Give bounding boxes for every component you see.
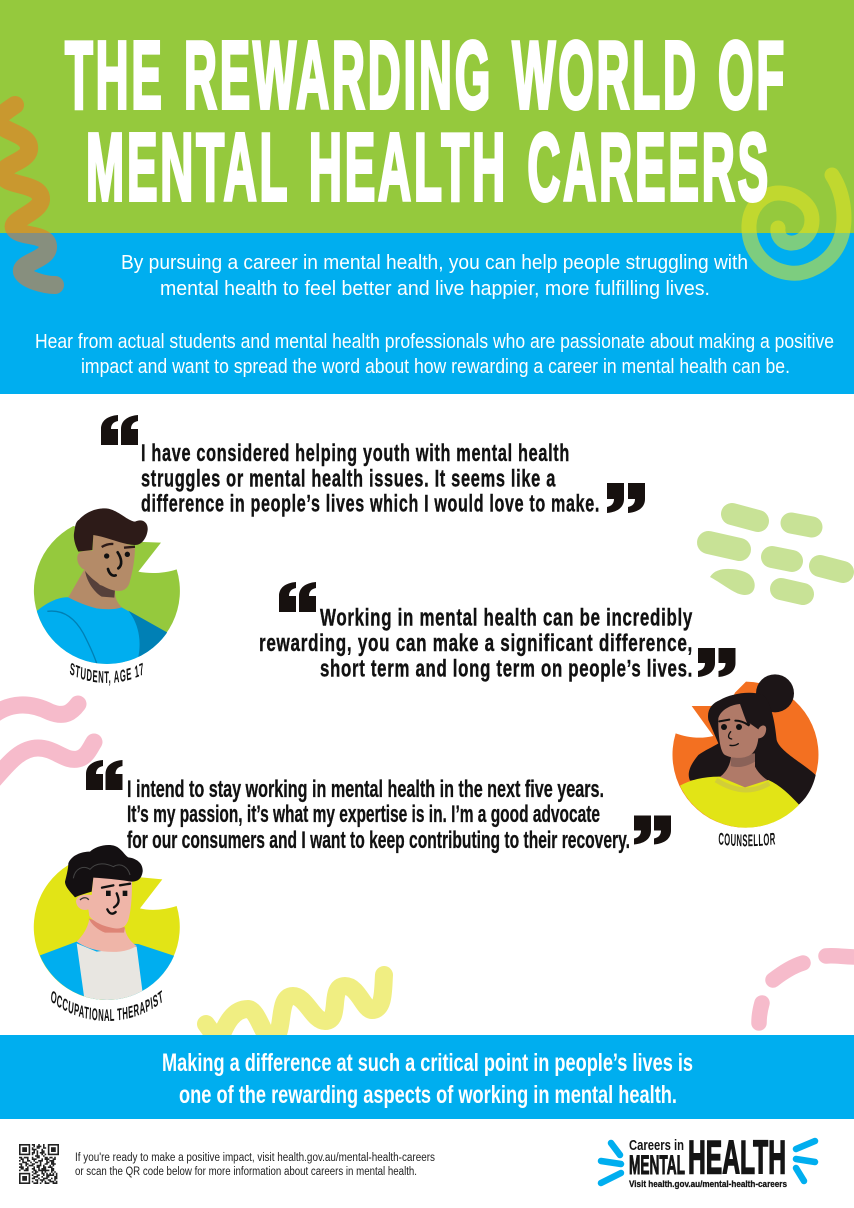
bottom band text (162, 1049, 693, 1109)
icon: opening quote mark (279, 582, 316, 612)
decoration: yellow squiggle (206, 975, 384, 1042)
logo wordmark: MENTAL (629, 1150, 685, 1180)
icon: opening quote mark (101, 415, 138, 445)
logo wordmark: Visit health.gov.au/mental-health-careers (629, 1179, 787, 1190)
quote text: rewarding, you can make a significant difference, (259, 630, 693, 657)
quote text: I have considered helping youth with mental health (141, 440, 570, 467)
logo wordmark (629, 1130, 787, 1190)
icon: closing quote mark (607, 483, 645, 513)
intro text: mental health to feel better and live happier, more fulfilling lives. (160, 278, 710, 300)
intro text: By pursuing a career in mental health, you can help people struggling with (121, 252, 748, 274)
decoration: green pills (708, 514, 843, 595)
quote text: difference in people’s lives which I would love to make. (141, 490, 600, 518)
hair (74, 508, 148, 552)
footer text (75, 1152, 435, 1178)
label: student, age 17: STUDENT, AGE 17 (70, 662, 143, 686)
header band (0, 0, 854, 233)
quote text: It’s my passion, it’s what my expertise is in. I’m a good advocate (127, 801, 600, 828)
quote text: short term and long term on people’s lives. (320, 656, 693, 682)
quote text (259, 604, 693, 682)
intro band (0, 233, 854, 394)
decoration: pink squiggles left (0, 704, 94, 782)
quote 2 (259, 582, 736, 682)
QR code (19, 1145, 58, 1183)
icon: opening quote mark (86, 760, 122, 790)
logo wordmark: Careers in (629, 1138, 684, 1154)
face features (104, 552, 130, 559)
icon: closing quote mark (634, 816, 671, 844)
quote text: I intend to stay working in mental health in the next five years. (127, 776, 604, 803)
face features (106, 891, 127, 896)
label: counsellor (718, 832, 776, 846)
footer text: If you're ready to make a positive impact, visit health.gov.au/mental-health-careers (75, 1152, 435, 1164)
bottom band (0, 1035, 854, 1119)
icon: closing quote mark (698, 648, 736, 677)
hair (65, 845, 143, 897)
title (65, 22, 787, 221)
portrait: student (33, 508, 180, 670)
squiggle: left orange (0, 105, 55, 285)
quote 3 (86, 760, 671, 854)
portrait: counsellor (672, 674, 818, 830)
decoration: pink dashes right (759, 956, 854, 1023)
label: counsellor: COUNSELLOR (718, 832, 776, 846)
bottom band text: one of the rewarding aspects of working in mental health. (179, 1081, 677, 1109)
quote text (141, 440, 600, 518)
spiral: right (749, 175, 844, 273)
portrait: occupational therapist (34, 845, 180, 1003)
quote text: struggles or mental health issues. It seems like a (141, 466, 556, 492)
quote text: Working in mental health can be incredibly (320, 604, 693, 632)
icon: logo rays (601, 1141, 815, 1183)
label: occupational therapist: OCCUPATIONAL THERAPIST (51, 990, 162, 1021)
hair (689, 674, 816, 805)
quote text (127, 776, 630, 854)
quote 1 (101, 415, 645, 518)
footer text: or scan the QR code below for more information about careers in mental health. (75, 1166, 417, 1178)
intro text (35, 252, 834, 378)
logo: careers in mental health (601, 1130, 815, 1190)
